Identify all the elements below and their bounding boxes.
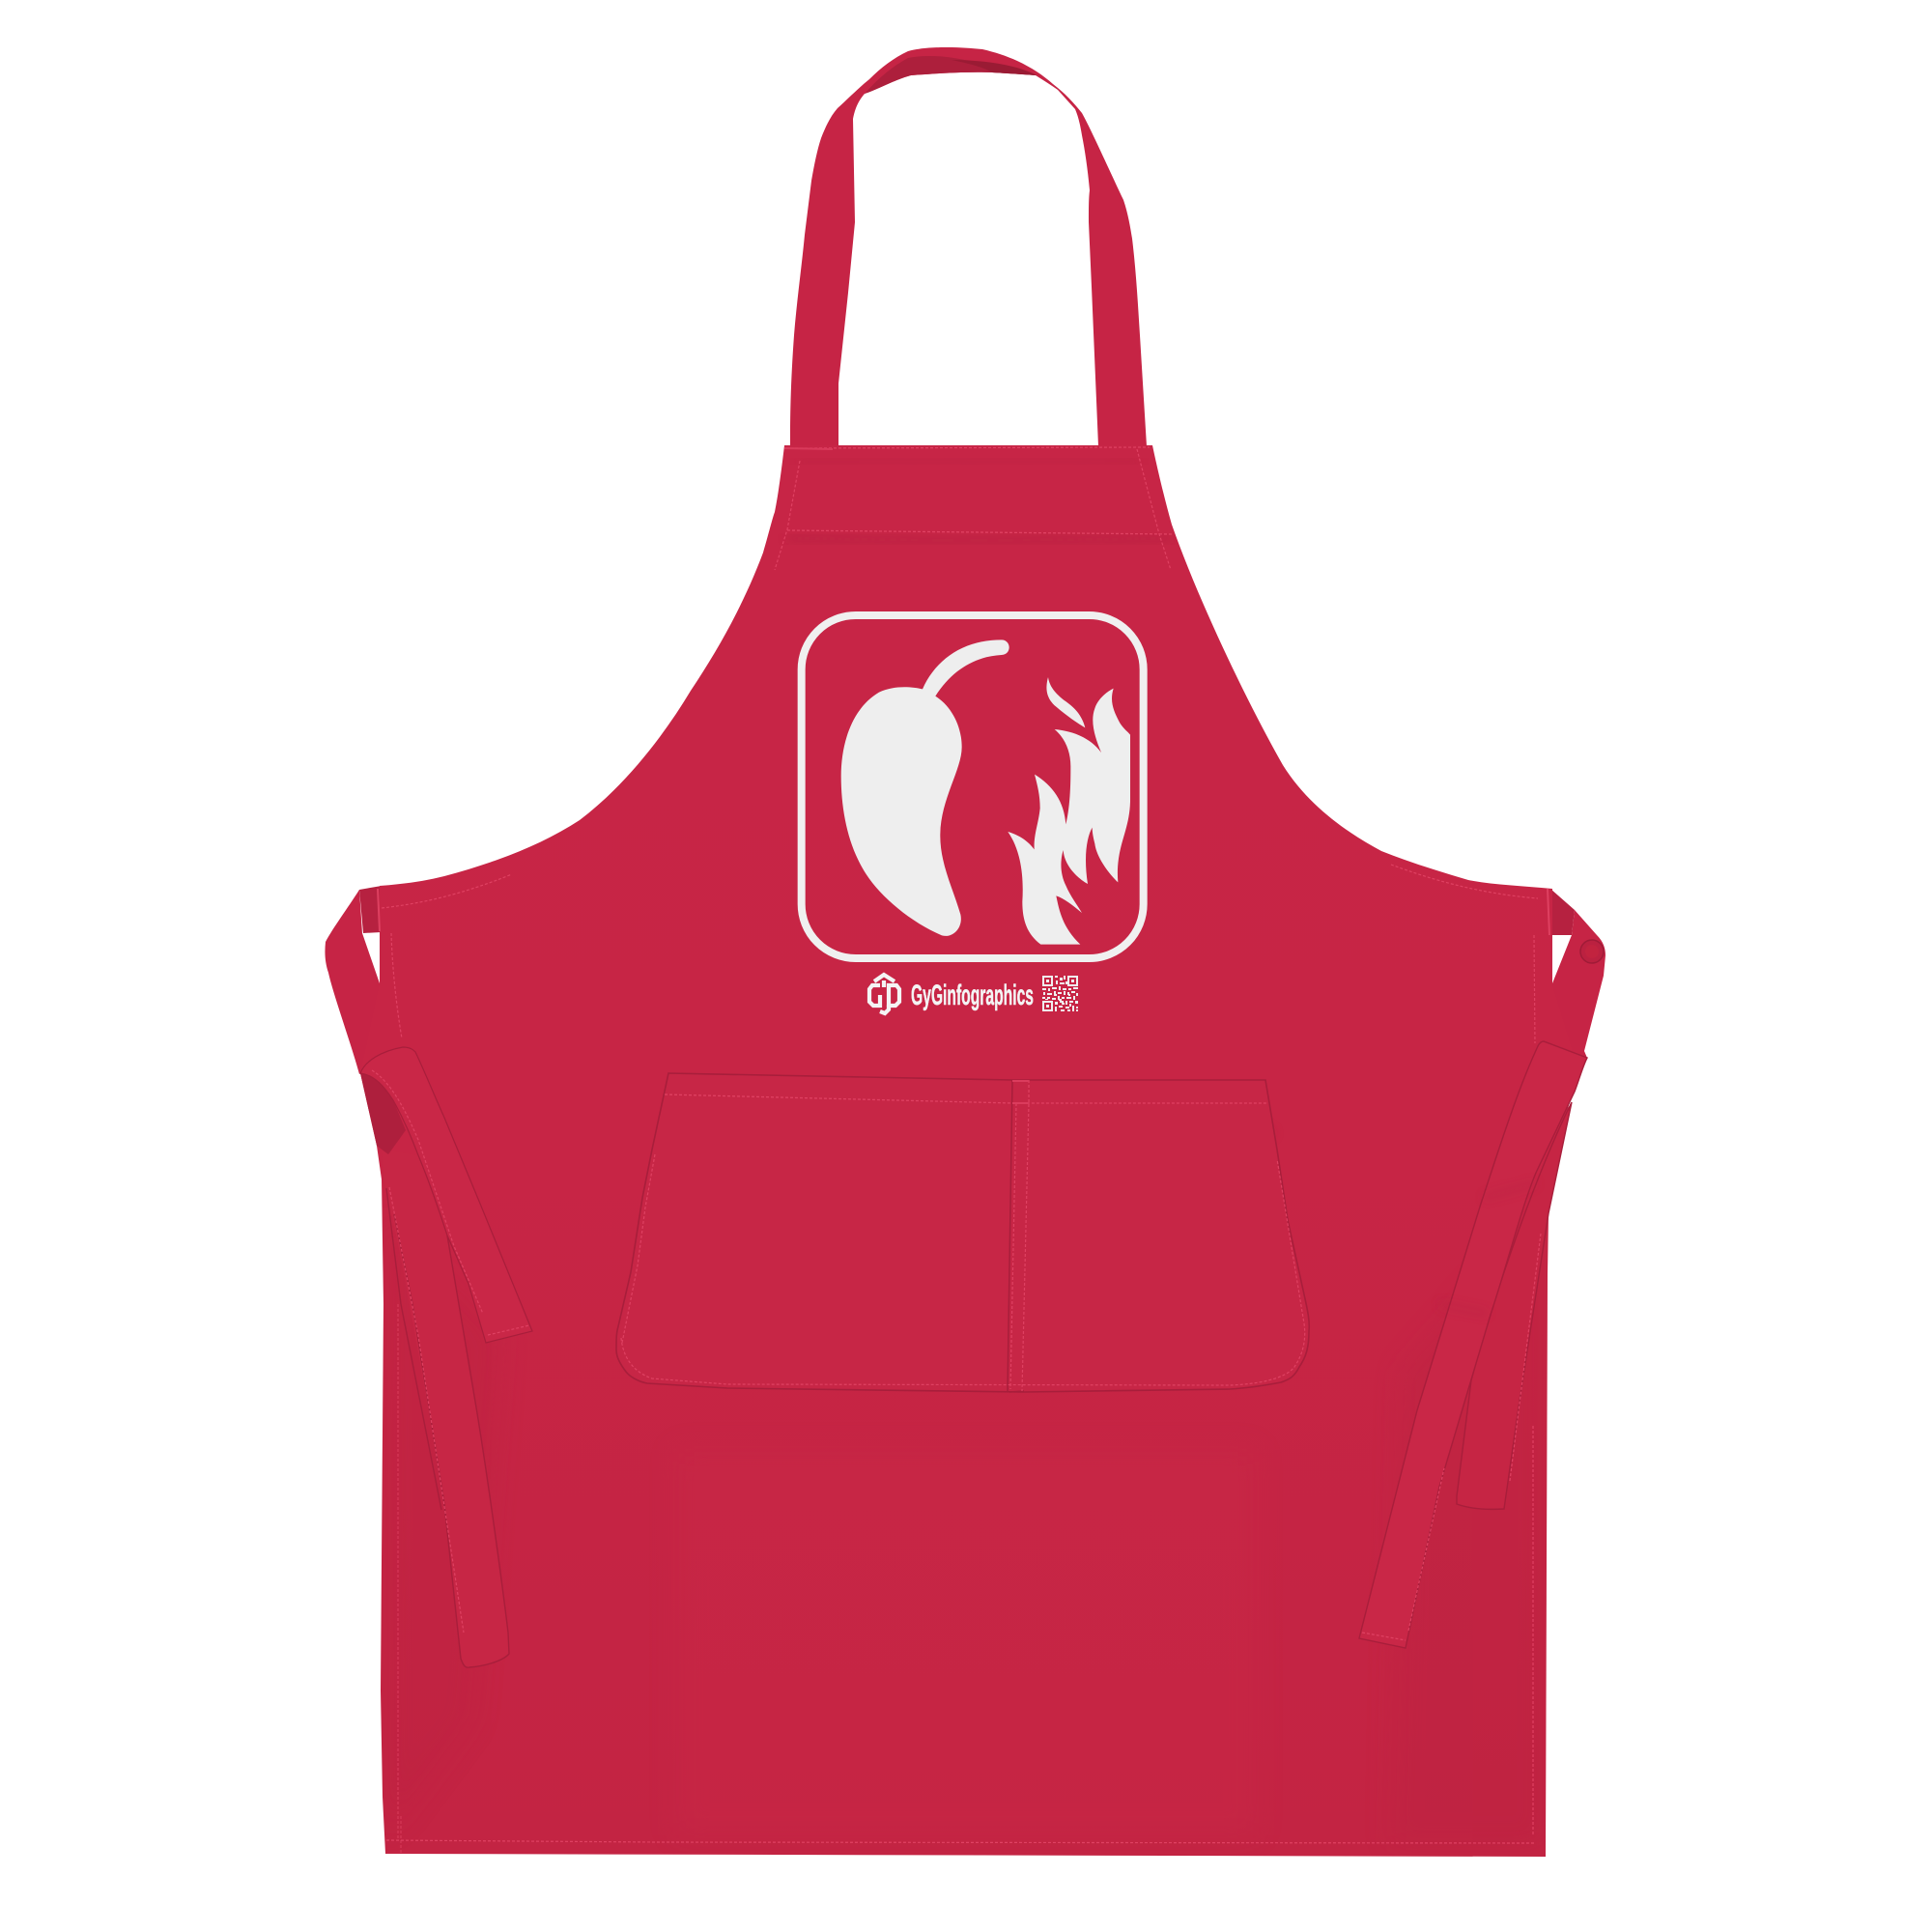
left shoulder strap [325, 890, 403, 1074]
pocket [616, 1073, 1309, 1392]
right ties [1359, 1041, 1587, 1648]
left back strap piece [359, 886, 382, 933]
left ties [360, 1047, 532, 1667]
right shoulder strap [1536, 910, 1605, 1058]
neck strap [790, 47, 1147, 446]
right back strap piece [1550, 889, 1575, 935]
brand name: GyGinfographics [911, 980, 1034, 1011]
QR code [1042, 976, 1078, 1011]
logo mark [869, 975, 899, 1013]
bib stitching [378, 447, 1549, 1853]
apron illustration [325, 47, 1605, 1857]
fabric shading [364, 611, 1586, 1794]
icon: chili pepper [841, 639, 1009, 936]
button [1580, 940, 1604, 963]
icon frame [802, 615, 1144, 958]
icon: flames [1008, 677, 1130, 945]
apron body [360, 445, 1575, 1857]
